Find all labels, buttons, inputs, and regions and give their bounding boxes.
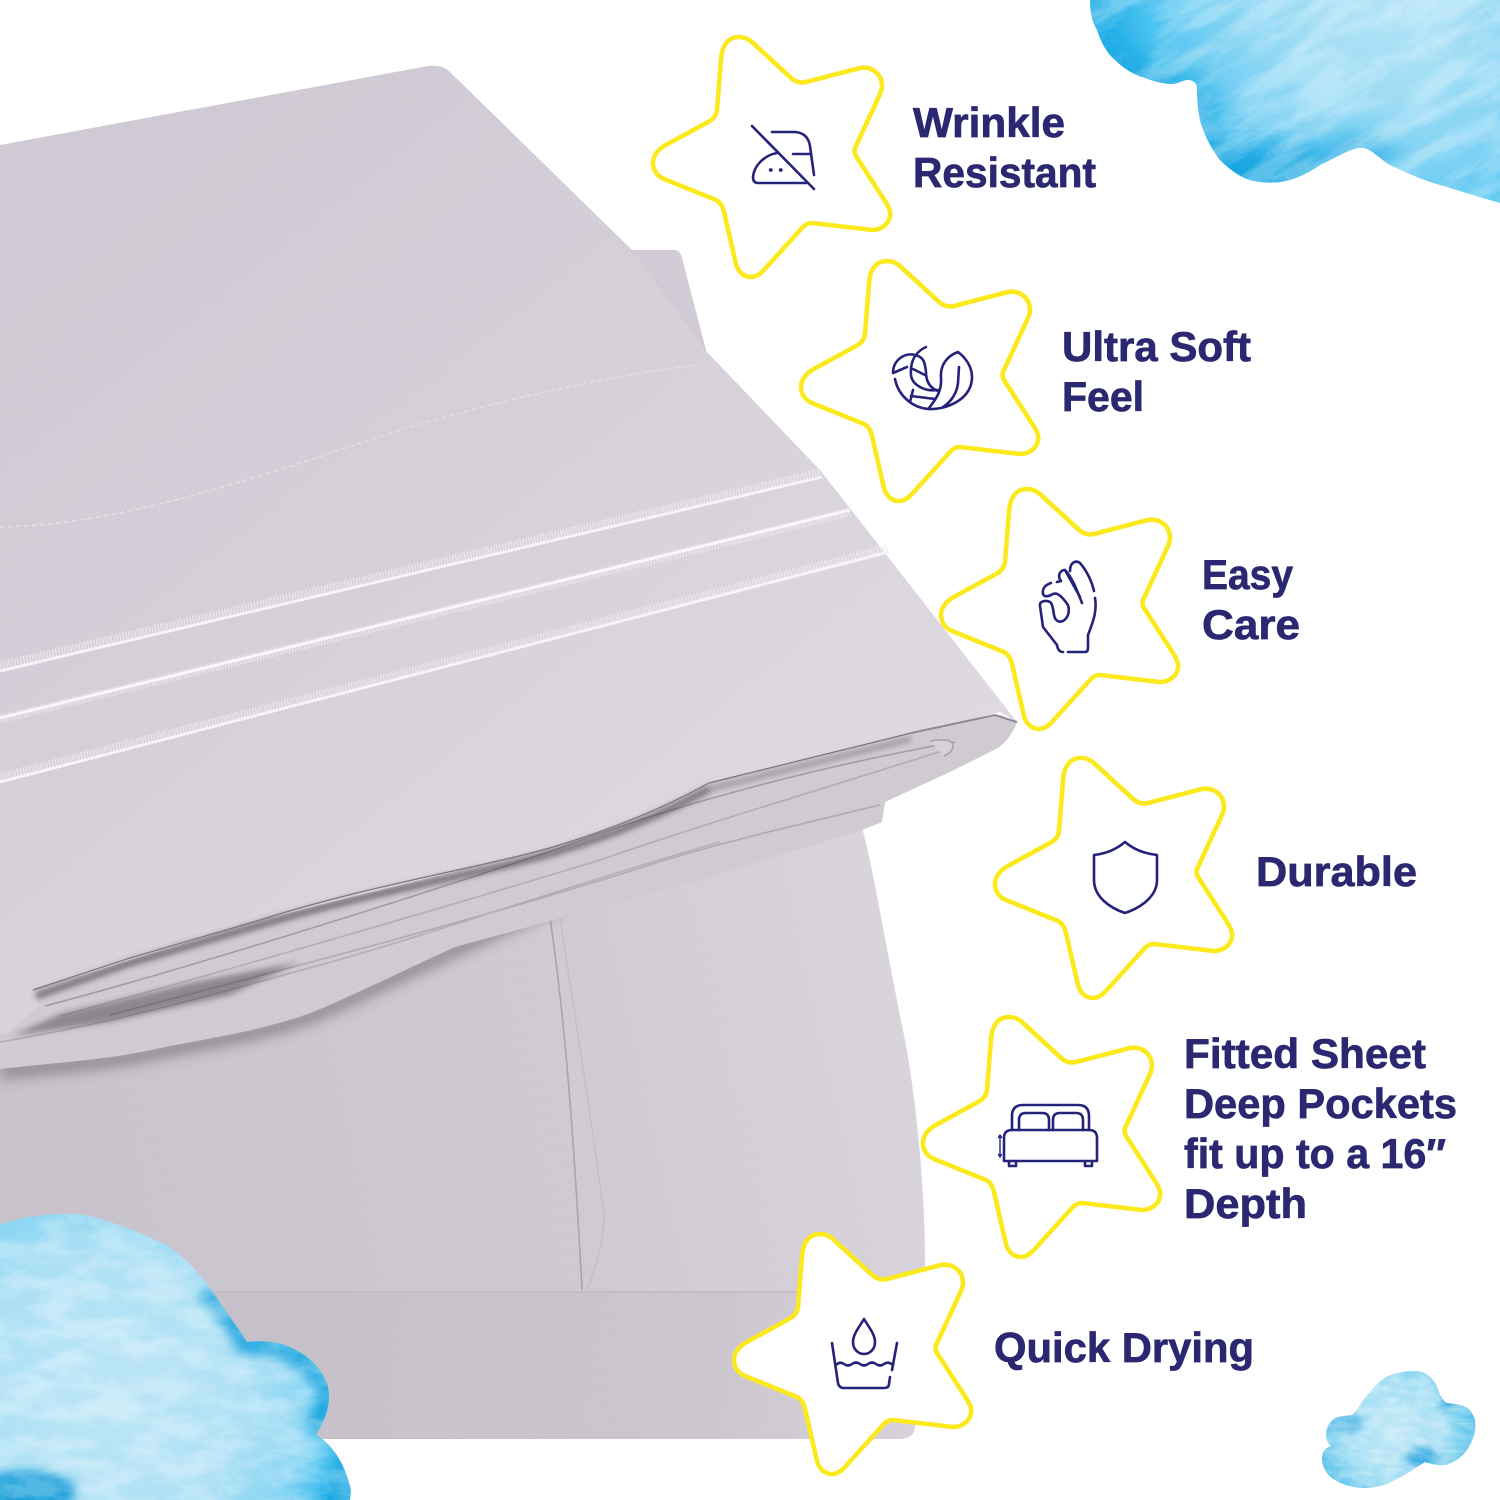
icon: feather and leaf (893, 347, 972, 409)
label: wrinkle resistant: Wrinkle (913, 99, 1065, 146)
cloud: bottom right (1322, 1371, 1476, 1488)
cloud: bottom left (0, 1205, 360, 1500)
feature: wrinkle resistant (653, 37, 1096, 277)
label: fitted sheet deep pockets: Fitted Sheet (1184, 1030, 1426, 1077)
icon: crossed-out iron (752, 126, 814, 189)
label: quick drying: Quick Drying (994, 1324, 1254, 1371)
label: ultra soft feel: Feel (1062, 373, 1144, 420)
embroidered stripes (0, 473, 888, 782)
label: fitted sheet deep pockets: fit up to a 16″ (1184, 1130, 1446, 1177)
label: wrinkle resistant: Resistant (913, 149, 1096, 196)
label: easy care: Care (1202, 601, 1300, 648)
icon: OK hand gesture (1040, 562, 1096, 652)
icon: shield (1094, 842, 1157, 913)
label: easy care: Easy (1202, 551, 1294, 598)
icon: water drop over basin (832, 1319, 897, 1388)
feature: quick drying (734, 1234, 1254, 1474)
star badge: quick drying (734, 1234, 971, 1474)
feature: durable (995, 758, 1417, 998)
label: fitted sheet deep pockets: Depth (1184, 1180, 1307, 1227)
shadow cast on fitted sheet (0, 903, 560, 1072)
star badge: fitted sheet (923, 1017, 1160, 1257)
feature: easy care (941, 489, 1300, 729)
cloud: top right (1090, 0, 1500, 203)
icon: bed with depth arrow (998, 1105, 1097, 1166)
folded layers under pillowcase (0, 715, 1017, 1069)
top pillowcase (0, 66, 1017, 1034)
star badge: ultra soft (801, 261, 1038, 501)
feature: fitted sheet deep pockets (923, 1017, 1457, 1257)
folded sheet set photo (0, 66, 1017, 1439)
star badge: easy care (941, 489, 1178, 729)
fold shadow wedge (12, 962, 300, 1036)
star badge: durable (995, 758, 1232, 998)
star badge: wrinkle resistant (653, 37, 890, 277)
back pillowcase corner (625, 250, 720, 420)
feature: ultra soft feel (801, 261, 1251, 501)
lower fitted sheet (0, 828, 925, 1439)
label: durable: Durable (1256, 848, 1417, 895)
label: ultra soft feel: Ultra Soft (1062, 323, 1251, 370)
fabric texture (0, 66, 1017, 1439)
label: fitted sheet deep pockets: Deep Pockets (1184, 1080, 1457, 1127)
